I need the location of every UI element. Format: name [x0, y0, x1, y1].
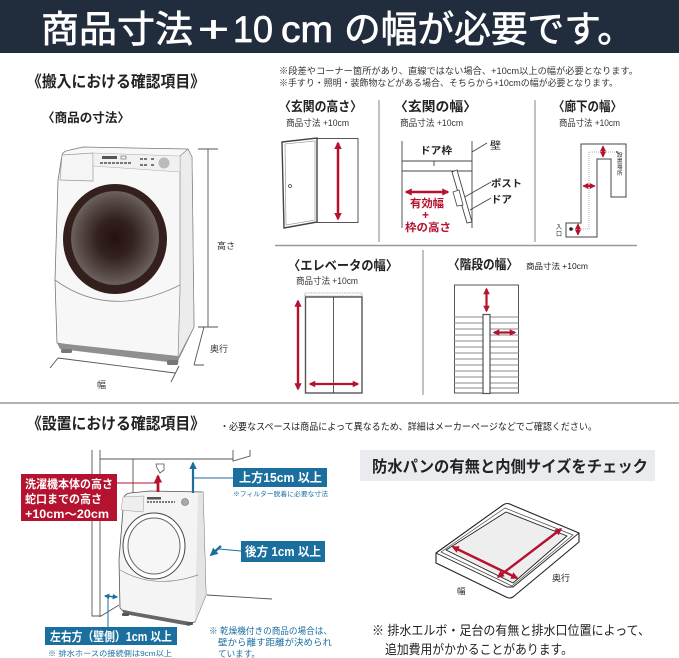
top notes	[279, 65, 638, 88]
panel: entrance width: 壁	[490, 140, 501, 152]
panel: entrance width	[394, 99, 522, 234]
callout: faucet height	[21, 474, 117, 521]
panel: corridor width: 入	[556, 224, 562, 231]
header banner: の幅が必要です。	[344, 9, 634, 50]
heading: delivery checks: 《搬入における確認項目》	[27, 72, 205, 91]
pan note: ※ 排水エルボ・足台の有無と排水口位置によって、	[372, 623, 650, 638]
panel: stairs width: 商品寸法 +10cm	[526, 261, 588, 271]
illustration: washing machine with dimensions: 高さ	[217, 240, 235, 251]
panel: entrance width: ドア	[491, 194, 512, 206]
heading: waterproof pan	[360, 450, 655, 481]
panel: entrance height: 〈玄関の高さ〉	[279, 99, 362, 114]
callout: faucet height: +10cm～20cm	[25, 509, 109, 521]
callout: side clearance: ※ 排水ホースの接続側は9cm以上	[48, 648, 173, 658]
callout: top clearance	[233, 468, 329, 498]
panel: entrance width: ドア枠	[420, 144, 452, 157]
panel: corridor width: 〈廊下の幅〉	[553, 99, 622, 114]
panel: corridor width: 場	[617, 163, 623, 171]
callout: rear clearance	[241, 541, 325, 562]
panel: entrance width: 商品寸法 +10cm	[400, 117, 463, 128]
top notes: ※段差やコーナー箇所があり、直線ではない場合、+10cm以上の幅が必要となります。	[279, 65, 638, 76]
header banner: 10	[233, 9, 273, 50]
illustration: waterproof pan: 奥行	[552, 573, 571, 583]
illustration: waterproof pan	[436, 504, 579, 598]
panel: entrance width: 〈玄関の幅〉	[394, 99, 477, 114]
callout: side clearance	[45, 627, 177, 658]
panel: corridor width: 口	[556, 231, 562, 238]
header banner: +	[198, 9, 229, 50]
heading: installation checks: 《設置における確認項目》	[27, 414, 205, 433]
panel: entrance width: ポスト	[491, 178, 522, 190]
dryer note	[209, 625, 332, 658]
panel: entrance width: 枠の高さ	[405, 220, 451, 234]
panel: corridor width: 所	[617, 169, 623, 177]
illustration: washing machine with dimensions	[50, 147, 235, 390]
header banner: cm	[281, 9, 333, 50]
installation note: ・必要なスペースは商品によって異なるため、詳細はメーカーページなどでご確認ください。	[220, 421, 597, 433]
pan note: 追加費用がかかることがあります。	[385, 642, 573, 657]
header banner	[0, 0, 679, 53]
panel: elevator width	[288, 258, 398, 393]
panel: elevator width: 商品寸法 +10cm	[296, 275, 358, 286]
illustration: waterproof pan: 幅	[457, 586, 466, 596]
panel: stairs width: 〈階段の幅〉	[448, 257, 518, 272]
panel: corridor width: 設	[617, 152, 623, 159]
panel: elevator width: 〈エレベータの幅〉	[288, 258, 398, 273]
callout: rear clearance: 後方 1cm 以上	[245, 544, 321, 559]
panel: stairs width	[448, 257, 588, 394]
callout: side clearance: 左右方（壁側）1cm 以上	[50, 629, 172, 644]
panel: corridor width	[553, 99, 626, 238]
dryer note: 壁から離す距離が決められ	[218, 636, 332, 648]
panel: corridor width: 商品寸法 +10cm	[559, 117, 620, 128]
illustration: washing machine with dimensions: 幅	[97, 379, 106, 390]
illustration: washing machine with dimensions: 奥行	[210, 343, 228, 354]
top notes: ※手すり・照明・装飾物などがある場合、そちらから+10cmの幅が必要となります。	[279, 77, 618, 88]
callout: top clearance: 上方15cm 以上	[239, 470, 322, 485]
callout: faucet height: 洗濯機本体の高さ	[25, 477, 113, 491]
illustration: installation clearances	[92, 450, 272, 627]
heading: product dimensions: 〈商品の寸法〉	[42, 110, 130, 125]
panel: entrance width: 有効幅	[410, 196, 444, 210]
dryer note: ※ 乾燥機付きの商品の場合は、	[209, 625, 332, 636]
panel: entrance width: +	[422, 208, 429, 222]
callout: top clearance: ※フィルター脱着に必要な寸法	[233, 489, 329, 498]
pan note	[372, 623, 650, 657]
panel: entrance height: 商品寸法 +10cm	[286, 117, 349, 128]
panel: entrance height	[279, 99, 362, 228]
callout: faucet height: 蛇口までの高さ	[25, 492, 102, 506]
heading: waterproof pan: 防水パンの有無と内側サイズをチェック	[372, 457, 648, 476]
panel: corridor width: 置	[617, 158, 623, 165]
header banner: 商品寸法	[41, 9, 193, 50]
